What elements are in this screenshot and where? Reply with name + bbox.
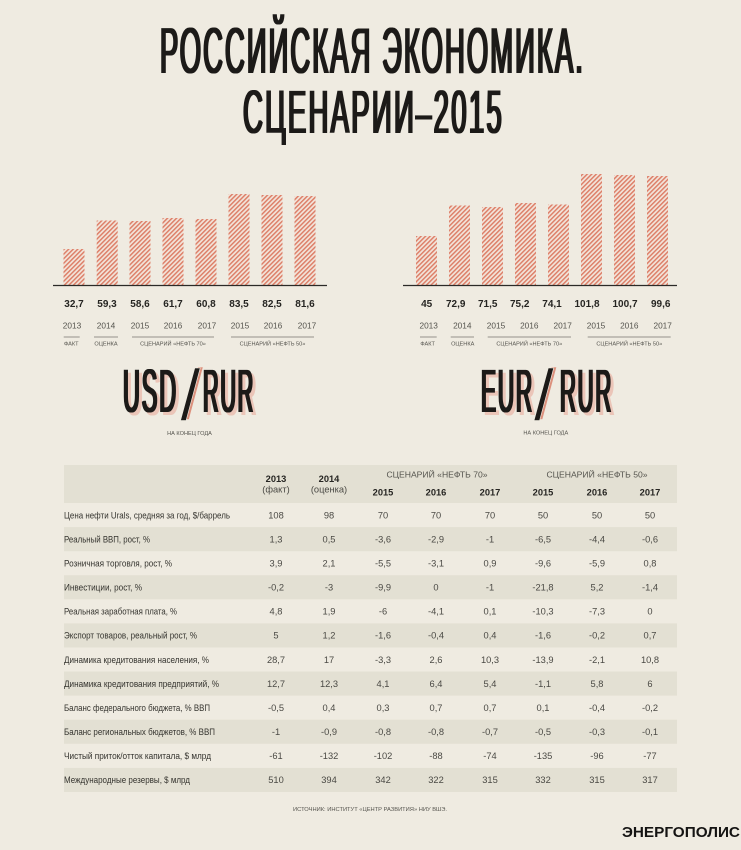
row: retail: -5,9 — [589, 558, 605, 568]
years: EUR/RUR: 2015 — [487, 321, 506, 331]
row: federal budget: 0,4 — [323, 703, 335, 713]
values: EUR/RUR: 45 — [421, 299, 433, 310]
row: regional budgets: -0,3 — [589, 727, 605, 737]
row: household credit: 10,3 — [481, 655, 499, 665]
logo: Энергополис: ЭНЕРГОПОЛИС — [622, 825, 741, 841]
row: wages: Реальная заработная плата, % — [64, 607, 177, 618]
table header: СЦЕНАРИЙ «НЕФТЬ 70» — [386, 468, 488, 480]
row: investment: 0 — [433, 583, 439, 593]
row: exports: -0,2 — [589, 631, 605, 641]
row: GDP: -6,5 — [535, 534, 551, 544]
row: investment — [64, 583, 658, 594]
row: investment: Инвестиции, рост, % — [64, 583, 142, 594]
row: retail: -9,6 — [535, 558, 551, 568]
scenario labels: EUR/RUR — [420, 337, 671, 347]
years: EUR/RUR: 2016 — [620, 321, 639, 331]
row: exports: 1,2 — [323, 631, 335, 641]
values: USD/RUR: 83,5 — [229, 299, 249, 310]
panel: EUR/RUR chart: RUR — [563, 360, 616, 428]
scenario labels: EUR/RUR: СЦЕНАРИЙ «НЕФТЬ 50» — [596, 339, 662, 347]
row: Urals — [64, 510, 655, 521]
row: federal budget: -0,4 — [589, 703, 605, 713]
row: federal budget — [64, 703, 658, 714]
years: USD/RUR: 2017 — [298, 320, 317, 330]
table header: 2016 — [426, 488, 446, 498]
row: GDP: Реальный ВВП, рост, % — [64, 534, 150, 545]
row: household credit: 17 — [324, 655, 334, 665]
table header: 2016 — [587, 488, 607, 498]
row: federal budget: 0,1 — [537, 703, 549, 713]
table header: 2013 — [266, 474, 286, 484]
row: capital flow: -135 — [534, 751, 552, 761]
row: capital flow: -61 — [269, 751, 283, 761]
row: corporate credit: 5,4 — [484, 679, 496, 689]
scenario labels: EUR/RUR: СЦЕНАРИЙ «НЕФТЬ 70» — [496, 339, 562, 347]
row: corporate credit: 6 — [647, 679, 653, 689]
row: GDP: -1 — [486, 534, 494, 544]
values: EUR/RUR: 72,9 — [446, 299, 466, 310]
row: wages: 0 — [647, 607, 653, 617]
row: federal budget: 0,7 — [484, 703, 496, 713]
row: investment: -0,2 — [268, 583, 284, 593]
row: GDP: -4,4 — [589, 534, 605, 544]
row: Urals: 70 — [485, 510, 495, 520]
heading: USD/RUR: USD — [123, 357, 178, 425]
row: corporate credit — [64, 679, 653, 690]
scenario labels: USD/RUR: СЦЕНАРИЙ «НЕФТЬ 50» — [240, 340, 305, 348]
row: retail: -3,1 — [428, 558, 444, 568]
values: EUR/RUR — [421, 299, 671, 310]
values: EUR/RUR: 74,1 — [542, 299, 562, 310]
years: EUR/RUR — [419, 321, 672, 331]
note: USD/RUR: НА КОНЕЦ ГОДА — [167, 431, 212, 437]
row: capital flow: -88 — [429, 751, 443, 761]
values: USD/RUR: 59,3 — [97, 299, 117, 310]
values: EUR/RUR: 101,8 — [574, 299, 600, 310]
row: corporate credit: Динамика кредитования предприятий, % — [64, 679, 219, 690]
heading: EUR/RUR: EUR — [484, 360, 537, 428]
row: household credit: -13,9 — [532, 655, 554, 665]
scenario labels: USD/RUR: ФАКТ — [64, 342, 79, 348]
row: household credit — [64, 655, 659, 666]
row: investment: -1 — [486, 583, 494, 593]
source note: ИСТОЧНИК: ИНСТИТУТ «ЦЕНТР РАЗВИТИЯ» НИУ ВШЭ. — [293, 807, 447, 813]
row: retail: Розничная торговля, рост, % — [64, 558, 172, 570]
row: reserves: 394 — [321, 775, 337, 785]
values: USD/RUR: 58,6 — [130, 299, 150, 310]
scenario labels: USD/RUR: ОЦЕНКА — [94, 342, 118, 348]
row: regional budgets — [64, 727, 658, 738]
values: EUR/RUR: 71,5 — [478, 299, 498, 310]
row: Urals: 98 — [324, 510, 334, 520]
row: household credit: -2,1 — [589, 655, 605, 665]
table header — [262, 468, 660, 498]
row: exports: 0,7 — [644, 631, 656, 641]
table header: 2015 — [373, 488, 393, 498]
scenario labels: EUR/RUR: ОЦЕНКА — [451, 341, 475, 347]
row: GDP: -0,6 — [642, 534, 658, 544]
row: household credit: 2,6 — [430, 655, 442, 665]
row: GDP: 0,5 — [323, 534, 335, 544]
heading: USD/RUR: / — [180, 357, 200, 436]
panel: EUR/RUR chart: RUR — [560, 357, 613, 425]
values: EUR/RUR: 99,6 — [651, 299, 671, 310]
row: corporate credit: 12,3 — [320, 679, 338, 689]
values: EUR/RUR: 75,2 — [510, 299, 530, 310]
years: EUR/RUR: 2013 — [419, 321, 438, 331]
row: retail: 2,1 — [323, 558, 335, 568]
panel: USD/RUR chart: RUR — [206, 360, 258, 428]
row: capital flow: -74 — [483, 751, 497, 761]
row: corporate credit: 5,8 — [591, 679, 603, 689]
row: capital flow: Чистый приток/отток капитала, $ млрд — [64, 751, 211, 762]
row: wages: 4,8 — [270, 607, 282, 617]
row: retail: 0,8 — [644, 558, 656, 568]
row: regional budgets: -0,5 — [535, 727, 551, 737]
row: exports — [64, 631, 656, 642]
row: capital flow: -132 — [320, 751, 338, 761]
row: retail: 0,9 — [484, 558, 496, 568]
row: corporate credit: 12,7 — [267, 679, 285, 689]
row: household credit: -3,3 — [375, 655, 391, 665]
values: EUR/RUR: 100,7 — [612, 299, 638, 310]
row: regional budgets: -1 — [272, 727, 280, 737]
row: federal budget: -0,5 — [268, 703, 284, 713]
row: federal budget: Баланс федерального бюджета, % ВВП — [64, 703, 210, 714]
row: corporate credit: 4,1 — [377, 679, 389, 689]
panel: USD/RUR chart — [53, 194, 327, 437]
years: USD/RUR: 2015 — [131, 320, 150, 330]
table header: (оценка) — [311, 485, 347, 495]
years: USD/RUR: 2016 — [264, 320, 283, 330]
values: USD/RUR: 32,7 — [64, 299, 84, 310]
scenario labels: EUR/RUR: ФАКТ — [420, 341, 436, 347]
row: capital flow: -77 — [643, 751, 657, 761]
row: GDP: 1,3 — [270, 534, 282, 544]
heading: EUR/RUR: / — [537, 356, 557, 435]
row: federal budget: 0,3 — [377, 703, 389, 713]
values: USD/RUR: 60,8 — [196, 299, 216, 310]
years: EUR/RUR: 2015 — [587, 321, 606, 331]
row: exports: -0,4 — [428, 631, 444, 641]
row: federal budget: 0,7 — [430, 703, 442, 713]
row: investment: 5,2 — [591, 583, 603, 593]
row: reserves: 315 — [589, 775, 605, 785]
row: household credit: Динамика кредитования населения, % — [64, 655, 209, 666]
years: USD/RUR: 2016 — [164, 320, 183, 330]
table header: СЦЕНАРИЙ «НЕФТЬ 50» — [546, 468, 648, 480]
row: investment: -9,9 — [375, 583, 391, 593]
years: EUR/RUR: 2017 — [553, 321, 572, 331]
heading: EUR/RUR: / — [534, 357, 554, 436]
values: USD/RUR: 82,5 — [262, 299, 282, 310]
values: USD/RUR — [64, 299, 315, 310]
row: regional budgets: -0,7 — [482, 727, 498, 737]
row: Urals: Цена нефти Urals, средняя за год, $/баррель — [64, 510, 230, 521]
row: GDP — [64, 534, 658, 545]
years: USD/RUR — [63, 320, 317, 330]
row: retail: 3,9 — [270, 558, 282, 568]
row: corporate credit: 6,4 — [430, 679, 442, 689]
row: reserves — [64, 775, 658, 786]
row: reserves: 315 — [482, 775, 498, 785]
row: reserves: Международные резервы, $ млрд — [64, 775, 190, 786]
table header: 2017 — [480, 488, 500, 498]
values: USD/RUR: 61,7 — [163, 299, 183, 310]
scenario labels: USD/RUR — [64, 337, 314, 348]
years: EUR/RUR: 2014 — [453, 321, 472, 331]
row: exports: 5 — [273, 631, 279, 641]
row: Urals: 108 — [268, 510, 284, 520]
row: Urals: 70 — [431, 510, 441, 520]
row: regional budgets: -0,1 — [642, 727, 658, 737]
row: household credit: 28,7 — [267, 655, 285, 665]
row: retail: -5,5 — [375, 558, 391, 568]
table header: (факт) — [262, 485, 290, 495]
row: regional budgets: -0,9 — [321, 727, 337, 737]
row: wages: -6 — [379, 607, 387, 617]
row: exports: -1,6 — [375, 631, 391, 641]
panel: EUR/RUR chart — [403, 174, 677, 437]
row: wages: -4,1 — [428, 607, 444, 617]
row: wages — [64, 607, 653, 618]
heading: EUR/RUR: EUR — [481, 357, 534, 425]
row: reserves: 317 — [642, 775, 658, 785]
row: regional budgets: -0,8 — [375, 727, 391, 737]
row: Urals: 50 — [538, 510, 548, 520]
years: EUR/RUR: 2017 — [653, 321, 672, 331]
row: exports: -1,6 — [535, 631, 551, 641]
row: investment: -3 — [325, 583, 333, 593]
row: GDP: -2,9 — [428, 534, 444, 544]
heading: USD/RUR: USD — [126, 360, 181, 428]
years: EUR/RUR: 2016 — [520, 321, 539, 331]
row: reserves: 322 — [428, 775, 444, 785]
row: Urals: 50 — [592, 510, 602, 520]
row: investment: -1,4 — [642, 583, 658, 593]
row: capital flow: -96 — [590, 751, 604, 761]
row: reserves: 342 — [375, 775, 391, 785]
bar chart: EUR/RUR — [403, 174, 677, 286]
table: scenario indicators — [64, 465, 677, 792]
table header: 2015 — [533, 488, 553, 498]
row: Urals: 50 — [645, 510, 655, 520]
table header: 2014 — [319, 474, 340, 484]
panel: USD/RUR chart: RUR — [203, 357, 255, 425]
bar chart: USD/RUR — [53, 194, 327, 286]
years: USD/RUR: 2017 — [198, 320, 217, 330]
row: corporate credit: -1,1 — [535, 679, 551, 689]
row: federal budget: -0,2 — [642, 703, 658, 713]
row: investment: -21,8 — [532, 583, 554, 593]
title — [160, 14, 585, 146]
values: USD/RUR: 81,6 — [295, 299, 315, 310]
scenario labels: USD/RUR: СЦЕНАРИЙ «НЕФТЬ 70» — [140, 340, 206, 348]
row: capital flow: -102 — [374, 751, 392, 761]
row: regional budgets: -0,8 — [428, 727, 444, 737]
years: USD/RUR: 2015 — [231, 320, 250, 330]
row: regional budgets: Баланс региональных бюджетов, % ВВП — [64, 727, 215, 738]
row: wages: -10,3 — [532, 607, 554, 617]
row: GDP: -3,6 — [375, 534, 391, 544]
row: Urals: 70 — [378, 510, 388, 520]
years: USD/RUR: 2013 — [63, 320, 82, 330]
row: wages: -7,3 — [589, 607, 605, 617]
row: wages: 0,1 — [484, 607, 496, 617]
row: wages: 1,9 — [323, 607, 335, 617]
heading: USD/RUR: / — [184, 356, 204, 435]
years: USD/RUR: 2014 — [97, 320, 116, 330]
note: EUR/RUR: НА КОНЕЦ ГОДА — [523, 431, 568, 437]
row: household credit: 10,8 — [641, 655, 659, 665]
row: capital flow — [64, 751, 657, 762]
row: retail — [64, 558, 656, 570]
table header: 2017 — [640, 488, 660, 498]
table bands — [64, 465, 677, 792]
row: exports: Экспорт товаров, реальный рост, % — [64, 631, 197, 642]
row: exports: 0,4 — [484, 631, 496, 641]
row: reserves: 510 — [268, 775, 284, 785]
row: reserves: 332 — [535, 775, 551, 785]
